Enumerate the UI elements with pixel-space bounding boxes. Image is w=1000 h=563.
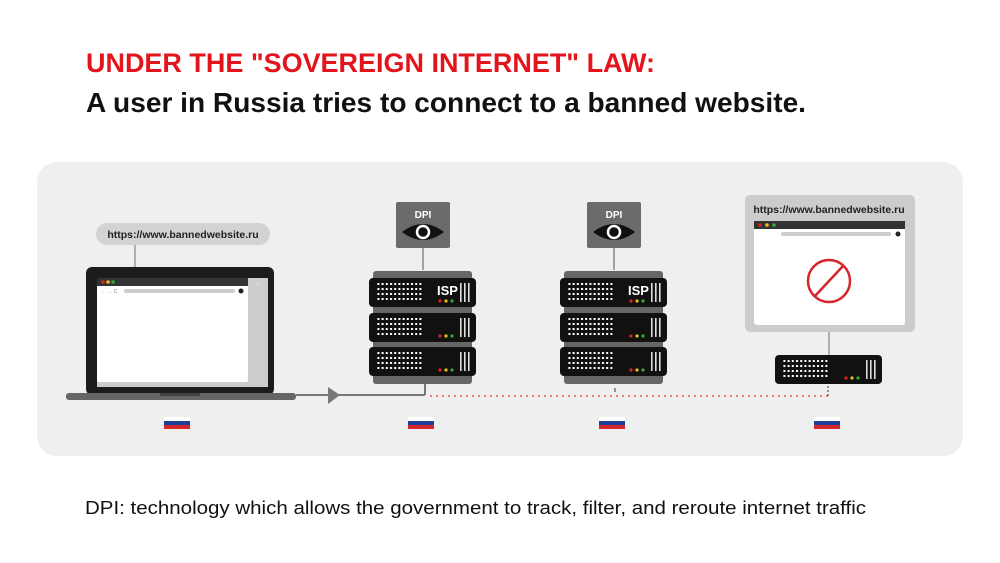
laptop: [66, 245, 296, 400]
laptop: ≋: [254, 279, 262, 289]
blocked website browser: https://www.bannedwebsite.ru: [753, 204, 905, 216]
url pill: https://www.bannedwebsite.ru: [107, 229, 259, 241]
website server: [775, 332, 882, 384]
connection arrow: [296, 384, 425, 404]
title: UNDER THE "SOVEREIGN INTERNET" LAW:: [86, 48, 655, 78]
footnote: DPI: technology which allows the government to track, filter, and reroute internet traffic: [85, 498, 866, 518]
DPI icon 2: [587, 202, 641, 270]
flags: [164, 417, 840, 429]
url pill: [96, 223, 270, 245]
blocked website browser: [745, 195, 915, 332]
red dotted rerouted line: [430, 386, 828, 396]
laptop: ← → C: [101, 289, 118, 295]
title: [86, 48, 806, 118]
ISP server 1: [369, 271, 476, 384]
DPI icon 1: [396, 202, 450, 270]
panel: diagram background: [37, 162, 963, 456]
icon: prohibited sign: [808, 260, 850, 302]
title: A user in Russia tries to connect to a banned website.: [86, 87, 806, 118]
ISP server 2: [560, 271, 667, 384]
